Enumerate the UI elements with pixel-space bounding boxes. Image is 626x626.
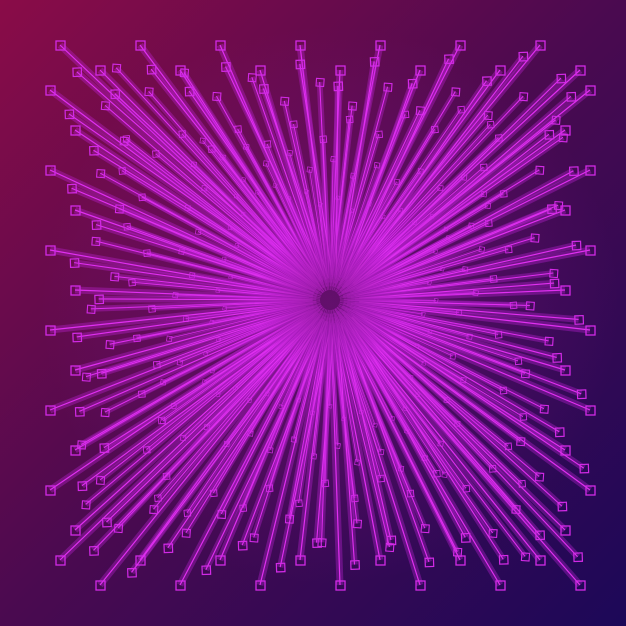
ray burst bbox=[46, 41, 595, 590]
